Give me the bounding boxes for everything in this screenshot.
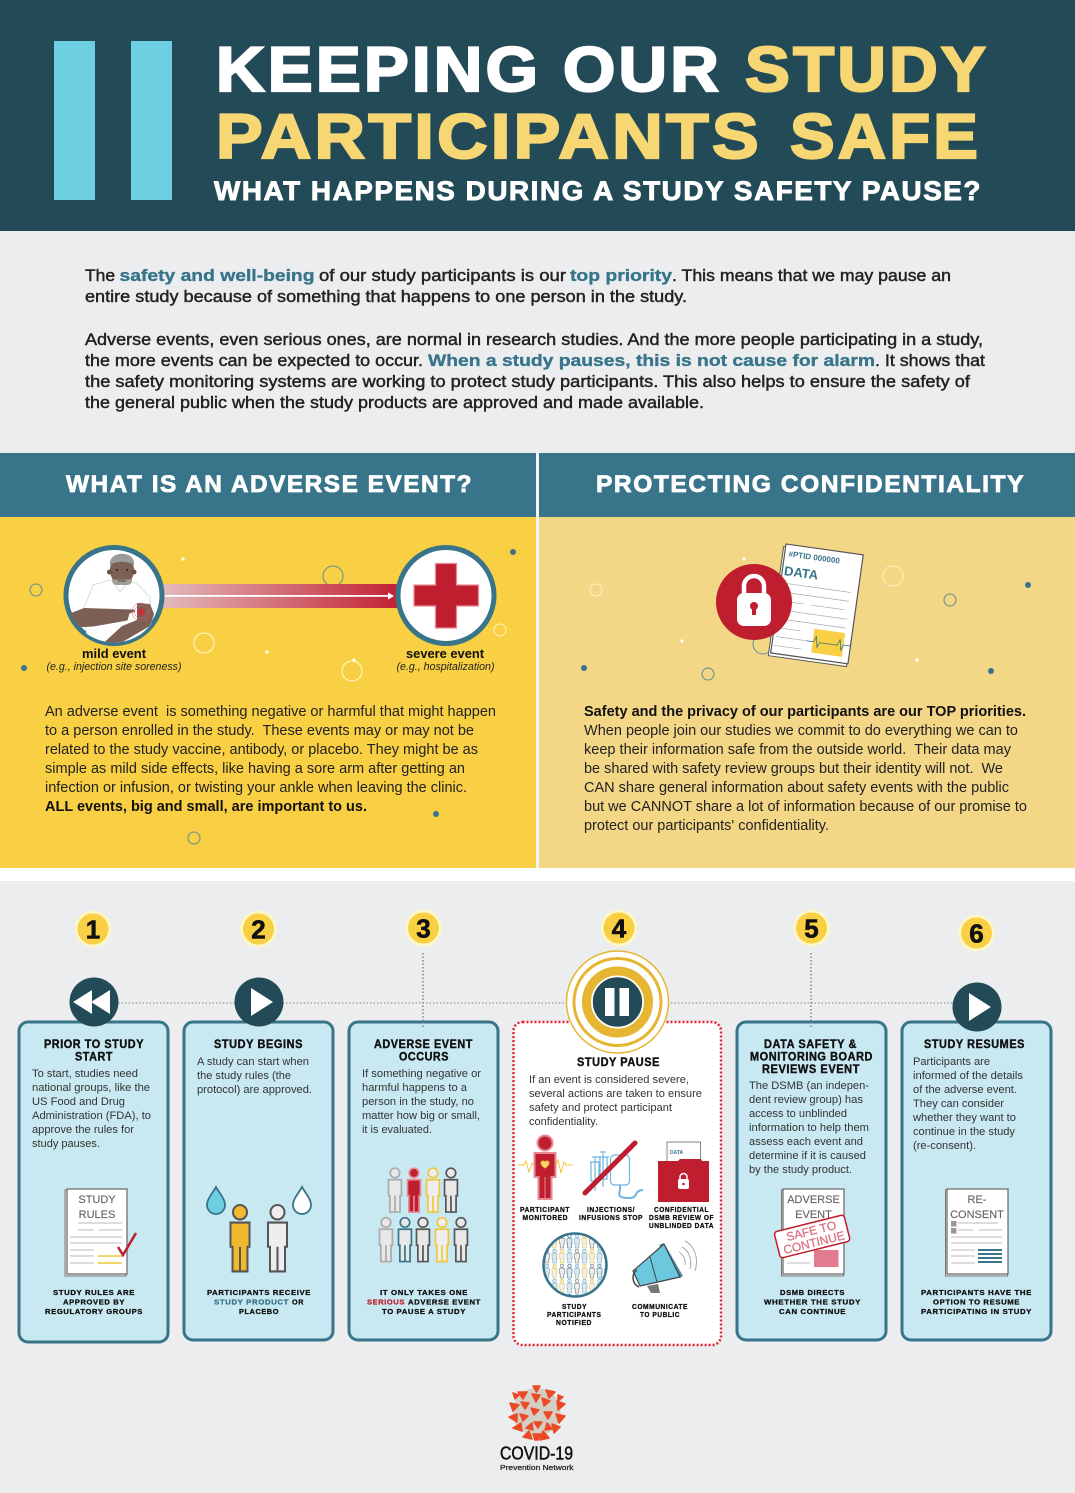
icon: data document [768,544,864,667]
text: adverse event definition: infection or infusion, or twisting your ankle when leaving the clinic. [45,780,467,796]
card 4 heading: STUDY PAUSE [577,1057,660,1069]
card 6: study resumes [902,914,1051,1340]
card 5 heading: DATA SAFETY & [764,1039,857,1051]
badge 6 [958,914,995,952]
card 3 heading: ADVERSE EVENT [374,1039,473,1051]
card 3: adverse event occurs [349,910,498,1340]
card 2 body [197,1056,312,1096]
heading: adverse event: WHAT IS AN ADVERSE EVENT? [66,471,473,498]
card 4 body: If an event is considered severe, [529,1074,689,1086]
icon: participant monitored [518,1136,573,1199]
badge 6: 6 [969,918,984,948]
card 4 body: confidentiality. [529,1116,598,1128]
card 5 body: dent review group) has [749,1094,863,1106]
card 6 body: of the adverse event. [913,1084,1017,1096]
card 3 caption: ADVERSE EVENT [408,1298,481,1306]
title [216,35,989,172]
label: severe event: severe event [406,646,485,661]
captions: notified, communicate: PARTICIPANTS [547,1310,602,1319]
title: KEEPING OUR [216,35,722,105]
icon: group of participants [380,1168,467,1262]
card 5 body: by the study product. [749,1164,852,1176]
icon: megaphone [633,1241,697,1293]
icon: participants with study product and placebo [207,1187,311,1271]
captions: monitored, stop, confidential: PARTICIPANT [520,1205,570,1214]
icon: safe to continue document: CONTINUE [782,1228,846,1257]
badge 3: 3 [416,914,431,944]
card 2 heading: STUDY BEGINS [214,1039,303,1051]
title: SAFE [790,102,981,172]
card 6 caption: PARTICIPANTS HAVE THE [921,1288,1032,1297]
card 2: study begins [184,910,333,1340]
card 1 body: study pauses. [32,1138,100,1150]
intro text: . This means that we may pause an [672,266,951,285]
heading: confidentiality: PROTECTING CONFIDENTIALITY [596,471,1025,498]
badge 1: 1 [86,914,100,944]
icon: study rules document [65,1189,136,1276]
captions: notified, communicate [547,1302,688,1327]
captions: monitored, stop, confidential: INFUSIONS STOP [579,1213,643,1222]
card 3 caption: IT ONLY TAKES ONE [380,1288,468,1297]
card 6 heading: STUDY RESUMES [924,1039,1025,1051]
intro text: Adverse events, even serious ones, are normal in research studies. And the more people participating in a study, [85,330,983,349]
label: severe event [396,646,495,673]
badge 5 [793,910,830,946]
card 3 body: it is evaluated. [362,1124,432,1136]
captions: monitored, stop, confidential [520,1205,714,1230]
arrow: mild to severe [160,584,402,608]
captions: monitored, stop, confidential: DSMB REVIEW OF [649,1213,714,1222]
card 1 body: approve the rules for [32,1124,134,1136]
card 2 body: A study can start when [197,1056,309,1068]
icon: data document: DATA [783,563,820,583]
text: confidentiality: When people join our studies we commit to do everything we can to [584,723,1018,739]
card 4 body: several actions are taken to ensure [529,1088,702,1100]
card 6 caption: OPTION TO RESUME [933,1298,1020,1306]
text: adverse event definition: to a person enrolled in the study. These events may or may not be [45,723,474,739]
card 6 body: Participants are [913,1056,990,1068]
icon: virus [509,1386,565,1440]
text: adverse event definition [45,704,496,815]
captions: monitored, stop, confidential: MONITORED [522,1213,568,1222]
card 3 body: matter how big or small, [362,1110,480,1122]
card 5 body: access to unblinded [749,1108,847,1120]
card 1 heading [44,1039,144,1064]
card 3 body: If something negative or [362,1068,481,1080]
card 2 caption: PARTICIPANTS RECEIVE [207,1288,311,1297]
captions: notified, communicate: COMMUNICATE [632,1302,688,1311]
intro text [85,266,985,412]
text: confidentiality: but we CANNOT share a lot of information because of our promise to [584,799,1027,815]
icon: re-consent document: CONSENT [950,1209,1004,1221]
card 5 caption: DSMB DIRECTS [780,1288,845,1297]
card 2 caption: OR [292,1298,304,1306]
intro text: entire study because of something that happens to one person in the study. [85,287,687,306]
card 2 caption: STUDY PRODUCT [214,1298,289,1306]
card 1 caption: STUDY RULES ARE [53,1288,135,1297]
icon: safe to continue document: SAFE TO [785,1218,838,1244]
captions: notified, communicate: TO PUBLIC [640,1310,680,1319]
text: confidentiality: protect our participants' confidentiality. [584,818,829,834]
card 4: study pause [514,910,721,1345]
icon: confidential folder [658,1142,709,1202]
card 1 heading: START [75,1052,113,1064]
card 2 caption [207,1288,311,1316]
card 6 body: continue in the study [913,1126,1016,1138]
badge 4 [600,910,638,946]
icon: injections and infusions stop [585,1143,643,1198]
card 6 body [912,1056,1024,1152]
icon: rewind [70,978,118,1026]
intro text: The [85,266,115,285]
icon: confidential folder: DATA [670,1150,684,1156]
logo: COVID-19 Prevention Network: Prevention Network [500,1463,574,1472]
logo: COVID-19 Prevention Network [500,1386,574,1472]
card 6 caption: PARTICIPATING IN STUDY [921,1307,1032,1316]
card 3 caption [367,1288,481,1316]
card 6 body: (re-consent). [913,1140,976,1152]
icon: pause with rings [566,951,668,1053]
card 3 caption: TO PAUSE A STUDY [382,1307,466,1316]
card 3 body: harmful happens to a [362,1082,468,1094]
intro text: the more events can be expected to occur. [85,351,423,370]
text: confidentiality: keep their information safe from the outside world. Their data may [584,742,1012,758]
icon: pause bars [54,41,172,200]
title: PARTICIPANTS [216,102,762,172]
card 5 body: information to help them [749,1122,869,1134]
intro text: top priority [570,266,673,285]
card 5 heading: MONITORING BOARD [750,1052,873,1064]
card 1 heading: PRIOR TO STUDY [44,1039,144,1051]
label: severe event: (e.g., hospitalization) [396,661,495,673]
card 5 body: determine if it is caused [749,1150,866,1162]
card 6 body: They can consider [913,1098,1004,1110]
captions: notified, communicate: STUDY [562,1302,587,1311]
card 6 body: whether they want to [912,1112,1016,1124]
intro text: the safety monitoring systems are working to protect study participants. This also helps to ensure the safety of [85,372,970,391]
intro text: safety and well-being [120,266,314,285]
card 5 body [749,1080,869,1176]
card 2 body: protocol) are approved. [197,1084,312,1096]
card 1 body: Administration (FDA), to [32,1110,151,1122]
icon: severe event red cross [398,548,494,644]
badge 2 [240,910,277,948]
icon: mild event man [54,548,162,651]
card 1 caption [45,1288,143,1316]
card 4 body: safety and protect participant [529,1102,672,1114]
badge 3 [405,910,442,946]
icon: re-consent document: RE- [968,1194,987,1206]
card 1 caption: APPROVED BY [63,1298,125,1306]
icon: play [234,978,284,1026]
panel: protecting confidentiality [539,453,1075,868]
text: adverse event definition: simple as mild side effects, like having a sore arm after getting an [45,761,465,777]
intro text: . It shows that [875,351,985,370]
badge 1 [74,910,112,948]
icon: safe to continue document: EVENT [795,1209,832,1221]
card 3 body [362,1068,481,1136]
panel: what is an adverse event [0,453,536,868]
captions: monitored, stop, confidential: CONFIDENTIAL [654,1205,709,1214]
card 5 body: assess each event and [749,1136,863,1148]
text: adverse event definition: ALL events, big and small, are important to us. [45,799,367,815]
icon: study rules document: STUDY [78,1194,116,1206]
badge 4: 4 [612,914,627,944]
card 5: data safety and monitoring board [737,910,886,1340]
card 3 caption: SERIOUS [367,1298,405,1306]
text: confidentiality: Safety and the privacy of our participants are our TOP priorities. [584,704,1026,720]
card 1 caption: REGULATORY GROUPS [45,1307,143,1316]
text: confidentiality: CAN share general information about safety events with the public [584,780,1009,796]
icon: study rules document: RULES [79,1209,115,1221]
logo: COVID-19 Prevention Network: COVID-19 [500,1444,573,1464]
card 5 heading: REVIEWS EVENT [762,1064,860,1076]
icon: resume play [952,982,1002,1032]
badge 2: 2 [251,914,266,944]
text: adverse event definition: related to the study vaccine, antibody, or placebo. They might be as [45,742,478,758]
text: confidentiality [584,704,1027,834]
icon: safe to continue document: ADVERSE [787,1194,840,1206]
card 3 body: person in the study, no [362,1096,474,1108]
subtitle: WHAT HAPPENS DURING A STUDY SAFETY PAUSE? [214,176,982,206]
icon: red padlock [716,564,792,640]
captions: notified, communicate: NOTIFIED [556,1318,592,1327]
card 5 caption [764,1288,861,1316]
timeline connector [118,953,955,1027]
intro text: When a study pauses, this is not cause for alarm [428,351,875,370]
card 6 body: informed of the details [913,1070,1024,1082]
card 1: prior to study start [19,910,168,1342]
label: mild event: mild event [82,646,147,661]
text: confidentiality: be shared with safety review groups but their identity will not. We [584,761,1003,777]
card 3 heading [374,1039,473,1064]
card 1 body [32,1068,151,1150]
icon: re-consent document [946,1189,1008,1276]
captions: monitored, stop, confidential: INJECTIONS/ [587,1205,635,1214]
header banner [0,0,1075,231]
card 5 body: The DSMB (an indepen- [749,1080,869,1092]
label: mild event [46,646,182,673]
card 4 body [529,1074,702,1128]
card 3 heading: OCCURS [399,1052,449,1064]
intro text: the general public when the study products are approved and made available. [85,393,704,412]
card 1 body: To start, studies need [32,1068,138,1080]
card 1 body: national groups, like the [32,1082,150,1094]
icon: participants notified [542,1232,608,1298]
card 5 heading [750,1039,873,1076]
card 2 caption: PLACEBO [239,1307,279,1316]
label: mild event: (e.g., injection site soreness) [46,661,182,673]
icon: data document: #PTID 000000 [788,550,841,566]
card 5 caption: WHETHER THE STUDY [764,1298,861,1306]
title: STUDY [745,35,989,105]
icon: safe to continue document [774,1189,850,1276]
captions: monitored, stop, confidential: UNBLINDED DATA [649,1221,714,1230]
badge 5: 5 [804,914,819,944]
card 5 caption: CAN CONTINUE [779,1307,846,1316]
intro text: of our study participants is our [319,266,566,285]
card 6 caption [921,1288,1032,1316]
text: adverse event definition: An adverse event is something negative or harmful that might happen [45,704,496,720]
card 1 body: US Food and Drug [32,1096,125,1108]
card 2 body: the study rules (the [197,1070,291,1082]
